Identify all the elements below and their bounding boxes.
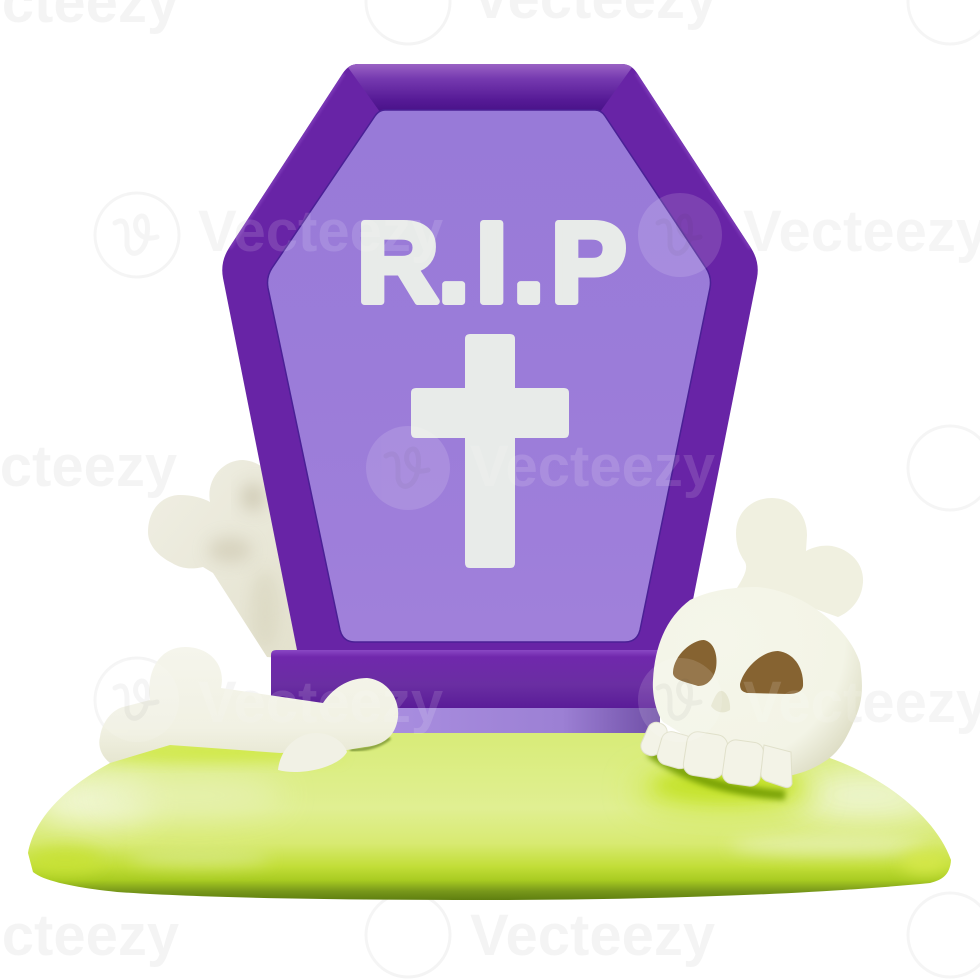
icon: nose — [711, 691, 730, 712]
tombstone frame — [222, 64, 758, 650]
watermark on background: Vecteezy — [198, 199, 443, 264]
watermark on background: Vecteezy — [470, 903, 715, 968]
skull teeth — [638, 719, 792, 788]
icon: cross — [411, 334, 569, 568]
watermark overlay: Vecteezy — [470, 434, 715, 499]
green ground mound — [27, 733, 951, 900]
watermark overlay: Vecteezy — [198, 199, 443, 264]
watermark on background: Vecteezy — [198, 670, 443, 735]
watermark overlay — [95, 193, 980, 742]
bone knob — [278, 733, 347, 772]
bone behind tombstone — [148, 460, 310, 660]
watermark overlay: Vecteezy — [198, 670, 443, 735]
skull — [638, 587, 862, 788]
bone lying on the ground — [99, 647, 398, 772]
heading: R.I.P: R.I.P — [357, 200, 626, 326]
icon: left eye socket — [673, 640, 716, 686]
bone behind skull — [736, 498, 863, 617]
tombstone inner panel — [268, 110, 710, 642]
tombstone base — [271, 650, 660, 735]
watermark on background: Vecteezy — [470, 434, 715, 499]
icon: right eye socket — [740, 651, 803, 694]
